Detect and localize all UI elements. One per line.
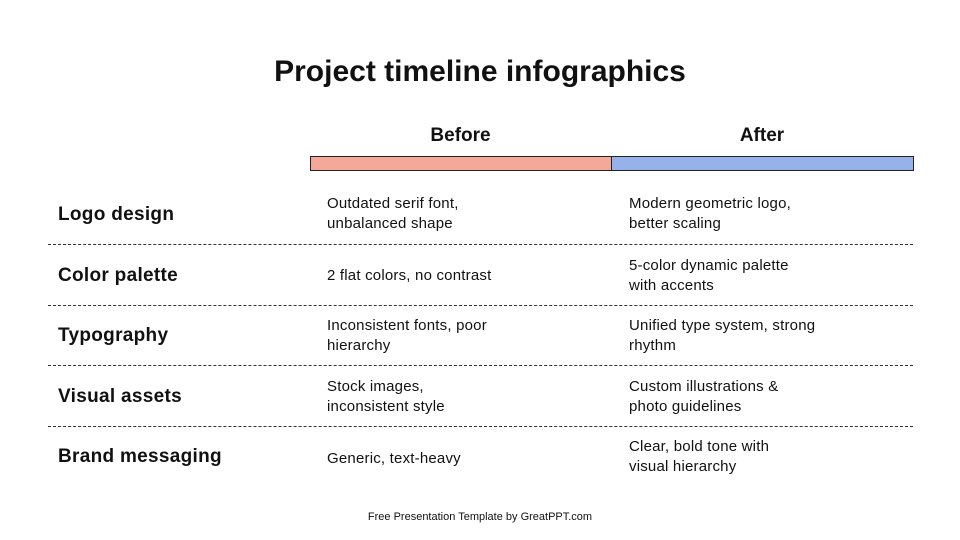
label: Visual assets [58,386,182,407]
before text: unbalanced shape [327,215,453,232]
before text: 2 flat colors, no contrast [327,267,491,284]
after text: Unified type system, strong [629,317,815,334]
after text [629,438,769,475]
after text [629,317,815,354]
after text: Modern geometric logo, [629,195,791,212]
row: color palette [58,257,789,294]
after text [629,195,791,232]
row: logo design [58,195,791,232]
header: after: After [740,125,784,146]
row: visual assets [58,378,778,415]
title: Project timeline infographics [274,55,686,88]
after text: visual hierarchy [629,458,736,475]
row: typography [58,317,815,354]
before text: hierarchy [327,337,390,354]
row: brand messaging [58,438,769,475]
after text: 5-color dynamic palette [629,257,789,274]
label: Typography [58,325,168,346]
before text [327,378,445,415]
bar: before [310,156,612,171]
bar: after [611,156,914,171]
after text [629,257,789,294]
before text [327,317,487,354]
before text [327,195,459,232]
before text: inconsistent style [327,398,445,415]
header: before: Before [430,125,491,146]
after text: photo guidelines [629,398,741,415]
before text: Outdated serif font, [327,195,459,212]
after text: Clear, bold tone with [629,438,769,455]
label: Logo design [58,204,174,225]
label: Brand messaging [58,446,222,467]
before text: Inconsistent fonts, poor [327,317,487,334]
after text: Custom illustrations & [629,378,778,395]
before text: Generic, text-heavy [327,450,461,467]
footer: Free Presentation Template by GreatPPT.com [368,511,592,523]
after text: better scaling [629,215,721,232]
after text: with accents [629,277,714,294]
after text: rhythm [629,337,676,354]
before text: Stock images, [327,378,424,395]
label: Color palette [58,265,178,286]
after text [629,378,778,415]
